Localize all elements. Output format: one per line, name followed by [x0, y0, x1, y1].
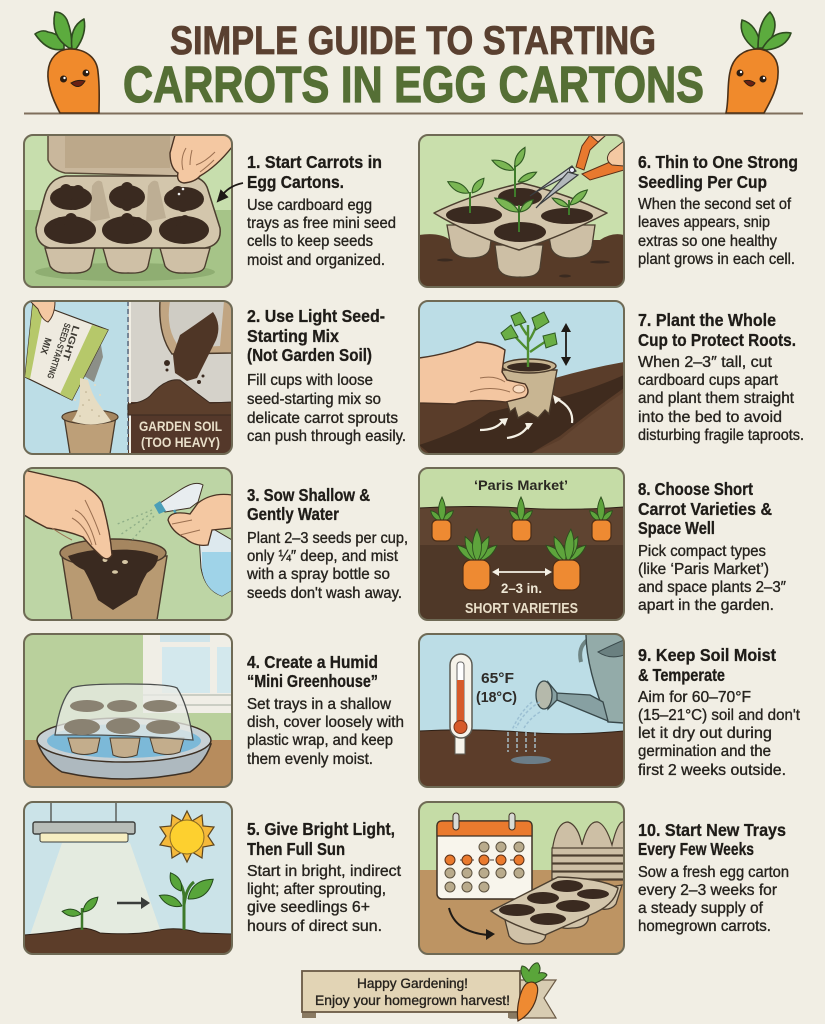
icon: banner carrot [517, 963, 547, 1021]
title: SIMPLE GUIDE TO STARTING [170, 19, 656, 63]
panel: step 3 illustration, sowing and misting [24, 468, 232, 620]
arrow: to carton [218, 183, 243, 201]
panel frame [419, 301, 624, 454]
panel: step 2 illustration, seed mix vs garden soil: (TOO HEAVY) [141, 435, 220, 450]
step 5 text [247, 819, 402, 935]
body: Aim for 60–70°F [638, 689, 751, 706]
body: leaves appears, snip [638, 214, 770, 231]
body: Start in bright, indirect [247, 863, 402, 880]
icon: left carrot mascot [35, 12, 99, 113]
panel: step 8 illustration, short carrot varieties [419, 468, 624, 620]
body: cells to keep seeds [247, 233, 373, 250]
body: light; after sprouting, [247, 881, 386, 898]
body: them evenly moist. [247, 751, 373, 768]
body: moist and organized. [247, 252, 385, 269]
body [638, 543, 786, 614]
body: (like ‘Paris Market’) [638, 561, 769, 578]
heading [638, 479, 772, 538]
panel: step 9 illustration, thermometer and watering can: 65°F [481, 670, 514, 687]
heading [247, 819, 395, 859]
panel: step 2 illustration, seed mix vs garden soil: MIX [37, 336, 53, 356]
title: CARROTS IN EGG CARTONS [123, 56, 704, 113]
panel: step 2 illustration, seed mix vs garden soil [24, 301, 232, 454]
body: Sow a fresh egg carton [638, 864, 789, 881]
heading: Then Full Sun [247, 839, 345, 859]
heading [247, 652, 378, 691]
heading: Cup to Protect Roots. [638, 330, 796, 350]
body: (15–21°C) soil and don't [638, 707, 801, 724]
step 8 text [638, 479, 786, 614]
title [123, 19, 704, 113]
heading: 7. Plant the Whole [638, 310, 776, 330]
body: disturbing fragile taproots. [638, 427, 804, 444]
body: trays as free mini seed [247, 215, 396, 232]
body: homegrown carrots. [638, 918, 771, 935]
body: into the bed to avoid [638, 409, 782, 426]
heading: Gently Water [247, 504, 339, 524]
heading: Starting Mix [247, 326, 339, 346]
heading [638, 645, 776, 685]
panel: step 6 illustration, thinning seedlings [419, 135, 624, 287]
heading: Space Well [638, 518, 715, 538]
step 7 text [638, 310, 804, 444]
body: and plant them straight [638, 390, 795, 407]
body: seed-starting mix so [247, 391, 381, 408]
body: When the second set of [638, 196, 792, 213]
heading [247, 306, 385, 365]
body: a steady supply of [638, 900, 764, 917]
body: Pick compact types [638, 543, 766, 560]
body: cardboard cups apart [638, 372, 779, 389]
panel: step 8 illustration, short carrot varieties: 2–3 in. [501, 580, 542, 596]
panel frame [24, 802, 232, 954]
body: germination and the [638, 743, 771, 760]
step 9 text [638, 645, 801, 779]
body [247, 372, 406, 445]
body: give seedlings 6+ [247, 899, 370, 916]
heading: 9. Keep Soil Moist [638, 645, 776, 665]
step 6 text [638, 152, 798, 268]
body [247, 197, 396, 269]
heading: 4. Create a Humid [247, 652, 378, 672]
panel: step 8 illustration, short carrot varieties: ‘Paris Market’ [474, 477, 568, 493]
body: plant grows in each cell. [638, 251, 795, 268]
body [638, 864, 789, 935]
step 2 text [247, 306, 406, 445]
heading [638, 152, 798, 192]
body: Plant 2–3 seeds per cup, [247, 530, 408, 547]
body: with a spray bottle so [246, 566, 390, 583]
panel frame [24, 468, 232, 620]
heading: 2. Use Light Seed- [247, 306, 385, 326]
heading: Seedling Per Cup [638, 172, 767, 192]
body: only ¼″ deep, and mist [247, 548, 399, 565]
heading: 8. Choose Short [638, 479, 753, 499]
panel: step 9 illustration, thermometer and watering can [419, 634, 624, 787]
heading: Egg Cartons. [247, 172, 344, 192]
body: can push through easily. [247, 428, 406, 445]
panel frame [419, 135, 624, 287]
body [638, 196, 795, 268]
footer banner: Enjoy your homegrown harvest! [315, 992, 510, 1008]
heading [638, 820, 786, 859]
body [638, 689, 801, 779]
panel: step 8 illustration, short carrot varieties: SHORT VARIETIES [465, 601, 578, 617]
step 10 text [638, 820, 789, 935]
body: Use cardboard egg [247, 197, 372, 214]
body: apart in the garden. [638, 597, 774, 614]
panel: step 1 illustration, egg carton and seeds [24, 135, 232, 287]
heading: 3. Sow Shallow & [247, 485, 370, 505]
body: delicate carrot sprouts [247, 410, 398, 427]
body: When 2–3″ tall, cut [638, 354, 773, 371]
panel: step 9 illustration, thermometer and watering can: (18°C) [476, 689, 517, 706]
heading [247, 152, 382, 192]
heading [638, 310, 796, 350]
heading: Every Few Weeks [638, 839, 754, 859]
heading: (Not Garden Soil) [247, 345, 372, 365]
step 1 text [247, 152, 396, 269]
body: every 2–3 weeks for [638, 882, 777, 899]
panel frame [24, 135, 232, 287]
body: Fill cups with loose [247, 372, 373, 389]
panel frame [24, 634, 232, 787]
heading: 1. Start Carrots in [247, 152, 382, 172]
footer banner: Happy Gardening! [357, 975, 468, 991]
body: let it dry out during [638, 725, 772, 742]
body: hours of direct sun. [247, 918, 382, 935]
panel: step 10 illustration, calendar and new trays [419, 802, 624, 954]
body: Set trays in a shallow [247, 696, 392, 713]
body: dish, cover loosely with [247, 714, 404, 731]
heading: 10. Start New Trays [638, 820, 786, 840]
panel frame [419, 802, 624, 954]
body: extras so one healthy [638, 233, 777, 250]
panel: step 7 illustration, planting whole cup [419, 301, 624, 454]
footer banner [302, 971, 556, 1018]
panel: step 2 illustration, seed mix vs garden soil: SEED-STARTING [45, 322, 73, 380]
body: plastic wrap, and keep [247, 732, 393, 749]
body [638, 354, 804, 444]
panel frame [419, 468, 624, 620]
panel: step 2 illustration, seed mix vs garden soil: GARDEN SOIL [139, 419, 222, 434]
panel: step 2 illustration, seed mix vs garden soil: LIGHT [60, 324, 81, 362]
heading: 6. Thin to One Strong [638, 152, 798, 172]
step 3 text [246, 485, 408, 602]
panel frame [24, 301, 232, 454]
panel: step 5 illustration, grow light then sun [24, 802, 232, 954]
heading [247, 485, 370, 524]
body [247, 863, 402, 935]
body [247, 696, 404, 768]
body: seeds don't wash away. [247, 585, 402, 602]
panel: step 4 illustration, humid mini greenhouse [24, 634, 232, 787]
body [246, 530, 408, 602]
heading: & Temperate [638, 665, 725, 685]
heading: Carrot Varieties & [638, 499, 772, 519]
body: and space plants 2–3″ [638, 579, 786, 596]
heading: “Mini Greenhouse” [247, 671, 378, 691]
heading: 5. Give Bright Light, [247, 819, 395, 839]
body: first 2 weeks outside. [638, 762, 786, 779]
panel frame [419, 634, 624, 787]
step 4 text [247, 652, 404, 768]
icon: right carrot mascot [726, 12, 791, 113]
